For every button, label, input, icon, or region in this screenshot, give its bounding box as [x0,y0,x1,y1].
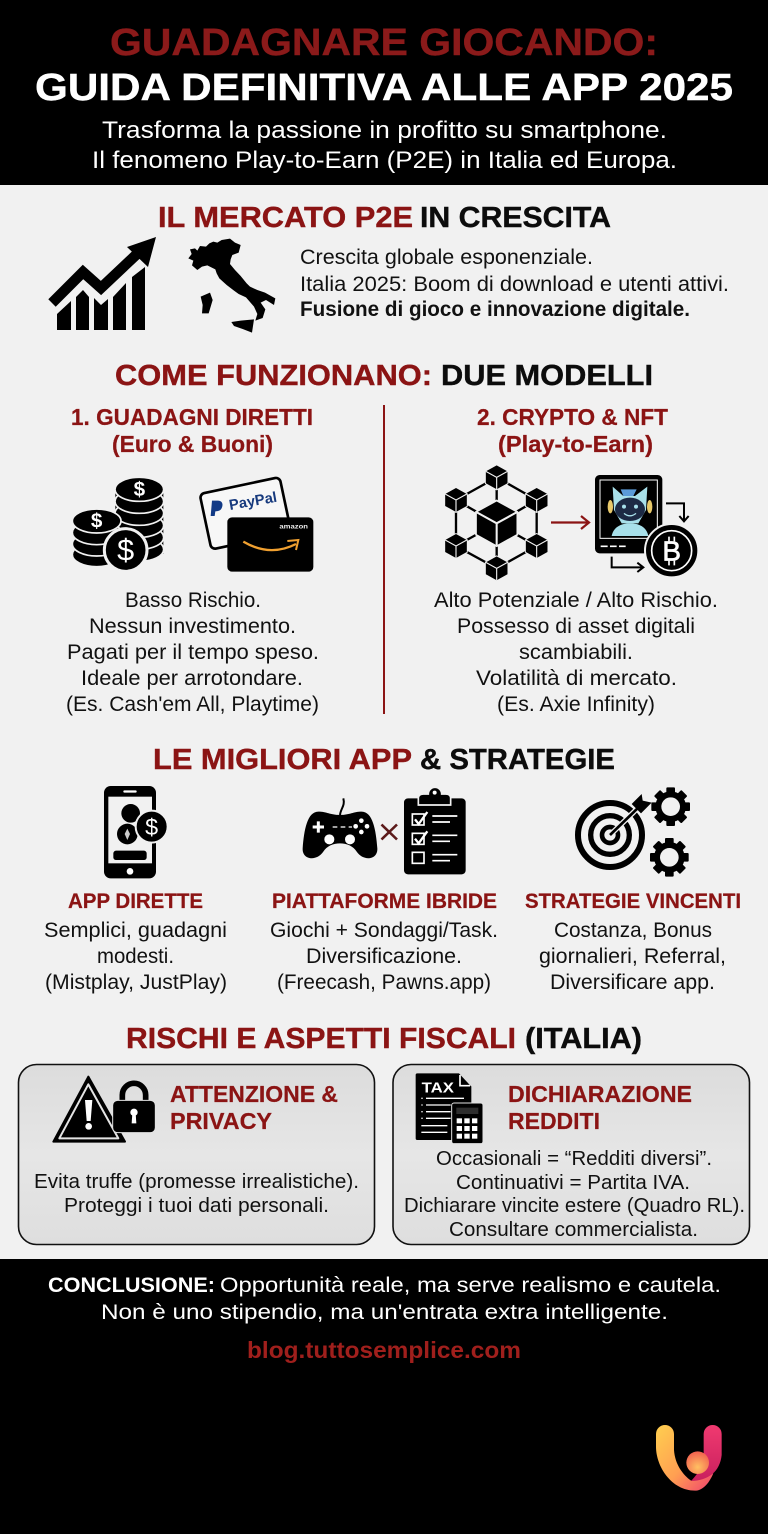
icon: clipboard checklist [404,787,466,874]
conclusion text: CONCLUSIONE: [48,1273,215,1297]
text: crypto: scambiabili. [519,641,633,664]
panel text: Consultare commercialista. [449,1219,698,1241]
website link: blog.tuttosemplice.com [247,1337,521,1363]
text: crypto: Volatilità di mercato. [476,667,677,690]
icon: map of Italy [188,239,275,333]
section heading: mercato: IL MERCATO P2E [158,202,413,234]
text: crypto: Alto Potenziale / Alto Rischio. [434,589,718,612]
text: mercato: Fusione di gioco e innovazione digitale. [300,298,690,321]
feature: strategie vincenti: giornalieri, Referral, [539,945,726,968]
logo [656,1425,722,1491]
text: guadagni diretti: Basso Rischio. [125,589,261,612]
conclusion text [48,1273,721,1324]
icon: growth chart [52,237,156,330]
panel heading [170,1081,338,1134]
text: crypto: Possesso di asset digitali [457,615,695,638]
feature: strategie vincenti: Costanza, Bonus [554,919,712,942]
divider [383,405,385,714]
feature: strategie vincenti: STRATEGIE VINCENTI [525,890,741,913]
icon: smartphone with coins: $ [145,814,158,840]
text: guadagni diretti: Nessun investimento. [89,615,296,638]
panel: dichiarazione redditi [393,1064,750,1244]
panel text [34,1171,359,1217]
panel text: Evita truffe (promesse irrealistiche). [34,1171,359,1193]
text: guadagni diretti: Ideale per arrotondare. [81,667,303,690]
column heading: guadagni diretti [71,404,313,457]
panel heading: ATTENZIONE & [170,1081,338,1107]
icon: coin stacks: $ [117,534,134,568]
feature: piattaforme ibride [270,890,498,994]
section heading: modelli: COME FUNZIONANO: [115,360,432,392]
icon: NFT tablet with bitcoin: B [662,536,681,567]
feature: strategie vincenti: Diversificare app. [550,971,715,994]
icon: Amazon gift card [227,517,313,572]
subtitle: Trasforma la passione in profitto su smartphone. [102,117,667,144]
panel text: Dichiarare vincite estere (Quadro RL). [404,1195,745,1217]
section heading: mercato [158,202,611,234]
text: guadagni diretti: Pagati per il tempo speso. [67,641,319,664]
feature: app dirette: Semplici, guadagni [44,919,227,942]
feature: strategie vincenti [525,890,741,994]
icon: smartphone with coins [104,786,168,878]
icon: warning and padlock [53,1077,155,1142]
section heading: app e strategie [153,744,615,776]
panel heading [508,1081,692,1134]
icon: tax form and calculator: TAX [422,1080,454,1096]
feature: app dirette [44,890,227,994]
icon: game controller [303,798,377,858]
feature: app dirette: APP DIRETTE [68,890,203,913]
section heading: rischi: (ITALIA) [525,1023,642,1055]
section heading: mercato: IN CRESCITA [420,202,611,234]
feature: piattaforme ibride: (Freecash, Pawns.app) [277,971,491,994]
icon: coin stacks: $ [134,478,146,501]
text: guadagni diretti [66,589,319,716]
icon: blockchain network [445,465,547,580]
icon: PayPal card [200,477,291,550]
column heading: crypto [477,404,668,457]
panel text: Proteggi i tuoi dati personali. [64,1195,329,1217]
icon: tax form and calculator [416,1073,483,1144]
icon: Amazon gift card: amazon [279,523,308,530]
conclusion text: Opportunità reale, ma serve realismo e cautela. [220,1273,721,1297]
title: GUADAGNARE GIOCANDO: [110,22,658,64]
panel heading: DICHIARAZIONE [508,1081,692,1107]
subtitle: Il fenomeno Play-to-Earn (P2E) in Italia ed Europa. [92,147,677,174]
icon: times sign [382,824,397,840]
subtitle [92,117,677,174]
column heading: crypto: 2. CRYPTO & NFT [477,404,668,430]
section heading: modelli: DUE MODELLI [441,360,653,392]
panel heading: REDDITI [508,1108,600,1134]
text: guadagni diretti: (Es. Cash'em All, Playtime) [66,693,319,716]
section heading: modelli [115,360,653,392]
text: mercato: Italia 2025: Boom di download e utenti attivi. [300,273,729,296]
conclusion text: Non è uno stipendio, ma un'entrata extra intelligente. [101,1300,668,1324]
title [35,22,733,109]
panel: attenzione e privacy [18,1064,374,1244]
icon: NFT tablet with bitcoin [595,475,698,577]
section heading: app e strategie: & STRATEGIE [420,744,615,776]
feature: piattaforme ibride: PIATTAFORME IBRIDE [272,890,497,913]
icon: coin stacks: $ [91,510,103,533]
panel text: Occasionali = “Redditi diversi”. [436,1148,712,1170]
panel text [404,1148,745,1241]
column heading: guadagni diretti: (Euro & Buoni) [112,431,273,457]
section heading: app e strategie: LE MIGLIORI APP [153,744,412,776]
text: mercato [300,246,729,321]
feature: piattaforme ibride: Diversificazione. [306,945,462,968]
icon: coin stacks [72,477,164,571]
header band [0,0,768,185]
feature: piattaforme ibride: Giochi + Sondaggi/Task. [270,919,498,942]
text: mercato: Crescita globale esponenziale. [300,246,593,269]
panel text: Continuativi = Partita IVA. [456,1172,690,1194]
icon: target with dart and gears [578,787,690,877]
section heading: rischi: RISCHI E ASPETTI FISCALI [126,1023,516,1055]
column heading: guadagni diretti: 1. GUADAGNI DIRETTI [71,404,313,430]
title: GUIDA DEFINITIVA ALLE APP 2025 [35,67,733,109]
feature: app dirette: modesti. [97,945,174,968]
footer band [0,1259,768,1534]
column heading: crypto: (Play-to-Earn) [498,431,653,457]
panel heading: PRIVACY [170,1108,272,1134]
icon: PayPal card: PayPal [228,490,278,514]
text: crypto [434,589,718,716]
arrow: blockchain to NFT [551,516,589,529]
feature: app dirette: (Mistplay, JustPlay) [45,971,227,994]
text: crypto: (Es. Axie Infinity) [497,693,655,716]
